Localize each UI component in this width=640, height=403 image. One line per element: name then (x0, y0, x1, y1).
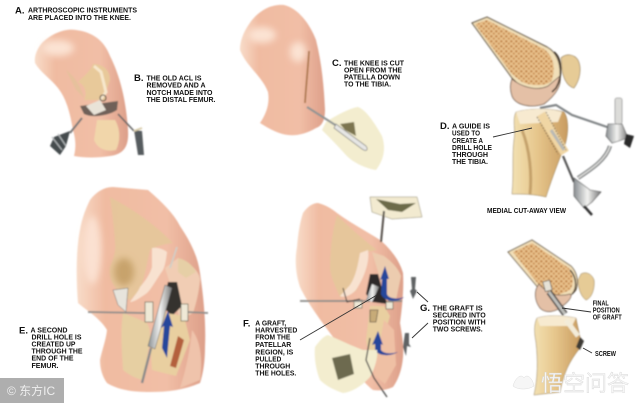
illustration: opened knee (77, 187, 208, 392)
watermark: 东方IC: © 东方IC (7, 383, 56, 398)
illustration: lower screw (403, 333, 411, 356)
panel: step C knee incision (240, 5, 384, 170)
label G: POSITION WITH (433, 320, 486, 327)
illustration: graft (543, 280, 578, 336)
label A: ARE PLACED INTO THE KNEE. (28, 15, 131, 22)
label D: THE TIBIA. (452, 159, 488, 166)
label D: DRILL HOLE (452, 145, 492, 152)
label E: END OF THE (32, 356, 74, 363)
label F: THROUGH (255, 363, 290, 370)
pointer lines G (412, 292, 428, 338)
label F: HARVESTED (255, 328, 297, 335)
illustration: tibia (512, 109, 568, 197)
instrument rod (148, 285, 172, 349)
panel: steps F and G graft (296, 197, 422, 397)
label C: PATELLA DOWN (344, 75, 400, 82)
illustration: patella (578, 273, 594, 300)
label B: THE OLD ACL IS (146, 76, 202, 82)
illustration: guide instrument (540, 98, 634, 215)
illustration: tibia (534, 316, 581, 395)
label A: A. (15, 6, 24, 16)
label B (134, 73, 216, 104)
label A: ARTHROSCOPIC INSTRUMENTS (28, 8, 137, 14)
label E: THROUGH THE (32, 349, 83, 356)
label G: G. (420, 303, 430, 314)
label A (15, 6, 137, 22)
label final position of graft: FINAL (593, 301, 609, 308)
label F: THE HOLES. (255, 371, 296, 378)
illustration: patella (561, 55, 580, 88)
illustration: drill tunnel (537, 112, 566, 154)
label B: REMOVED AND A (146, 83, 206, 90)
blue arrows (380, 266, 404, 301)
illustration: incision (305, 51, 309, 103)
label D: D. (440, 121, 450, 132)
label F: A GRAFT, (255, 321, 286, 328)
label final position of graft: POSITION (593, 308, 620, 315)
label C: C. (332, 58, 342, 69)
label D: THROUGH (452, 152, 488, 159)
label G: THE GRAFT IS (433, 306, 483, 313)
label G (420, 303, 486, 334)
label C: TO THE TIBIA. (344, 82, 391, 89)
label E: DRILL HOLE IS (32, 334, 82, 341)
illustration: lower gloved hand (315, 335, 387, 397)
label E: FEMUR. (32, 363, 59, 370)
label E: CREATED UP (32, 341, 76, 348)
label F: REGION, IS (255, 349, 294, 356)
watermark: 东方IC (0, 378, 64, 403)
label B: THE DISTAL FEMUR. (146, 97, 216, 104)
panel: step E second drill hole (77, 187, 208, 392)
label B: B. (134, 73, 144, 84)
label F: PULLED (255, 357, 281, 364)
label B: NOTCH MADE INTO (146, 90, 213, 97)
caption: medial cut-away view: MEDIAL CUT-AWAY VIEW (487, 208, 566, 215)
illustration: femur (508, 240, 577, 312)
label E: E. (19, 326, 28, 336)
illustration: upper hand with forceps (370, 197, 422, 242)
illustration: upper screw (410, 277, 417, 299)
label F: PATELLAR (255, 342, 291, 349)
blue arrow (161, 311, 173, 358)
illustration: gloved hand with scalpel (307, 107, 384, 170)
panel: step A and B arthroscopic knee (35, 30, 144, 157)
label E: A SECOND (30, 328, 68, 335)
label D: USED TO (452, 130, 480, 138)
pointer line D (493, 128, 532, 137)
label C: THE KNEE IS CUT (344, 60, 405, 68)
label E (19, 326, 83, 370)
illustration: femur cross-section (472, 17, 561, 106)
label F (243, 318, 297, 378)
watermark: 悟空问答: 悟空问答 (541, 371, 629, 396)
pointer line graft (562, 308, 591, 312)
label G: TWO SCREWS. (433, 327, 483, 334)
label F: FROM THE (255, 335, 291, 342)
label G: SECURED INTO (433, 312, 486, 320)
label C (332, 58, 405, 89)
label C: OPEN FROM THE (344, 68, 402, 75)
illustration: knee with arthroscopic instruments (35, 30, 144, 157)
pins and retractors (88, 312, 145, 313)
pointer line screw (583, 348, 592, 353)
label D: CREATE A (452, 138, 483, 145)
illustration: opened knee with graft (296, 203, 404, 390)
pointer line F (300, 295, 377, 340)
illustration: tibial screw (576, 337, 584, 350)
panel: final position of graft (508, 240, 594, 395)
label F: F. (243, 318, 250, 330)
label D (440, 121, 492, 166)
label D: A GUIDE IS (452, 124, 490, 130)
illustration: knee skin (240, 5, 325, 135)
panel: step D guide and drill through tibia (472, 17, 634, 215)
label final position of graft: OF GRAFT (593, 314, 622, 321)
label screw: SCREW (595, 351, 616, 358)
label final position of graft (593, 301, 622, 321)
